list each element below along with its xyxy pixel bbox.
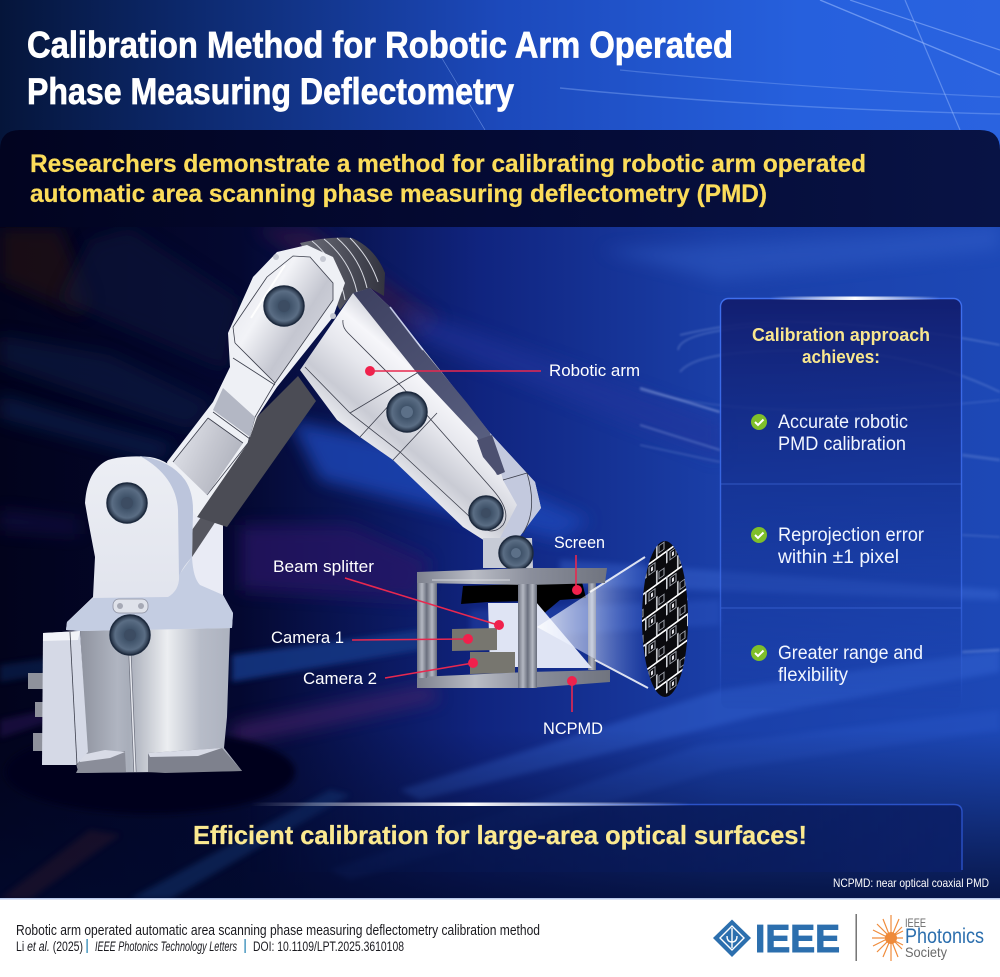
module: frame plates <box>417 568 610 688</box>
arm: wrist neck <box>483 538 533 568</box>
main background with light streaks <box>0 225 1000 899</box>
label: camera 1 <box>271 628 473 647</box>
arm: upper arm dark side <box>197 376 316 527</box>
panel heading: achieves: <box>802 346 880 367</box>
logo: IEEE Photonics Society: Society <box>905 944 947 960</box>
module: beam splitter <box>488 602 592 668</box>
subtitle text <box>30 150 866 208</box>
label: screen: Screen <box>554 533 605 552</box>
arm: elbow ribs <box>300 238 385 310</box>
label: camera 2 <box>303 658 478 688</box>
item: accurate calibration: Accurate robotic <box>778 412 908 433</box>
logo: IEEE <box>713 918 840 961</box>
arm: shoulder casing <box>66 456 233 631</box>
label: beam splitter: Beam splitter <box>273 557 374 576</box>
title <box>27 24 733 112</box>
header background <box>0 0 1000 150</box>
citation: Li et al. (2025) <box>16 939 83 954</box>
label: NCPMD <box>543 676 603 738</box>
subtitle text: Researchers demonstrate a method for calibrating robotic arm operated <box>30 150 866 178</box>
module: projected light beam <box>537 557 648 688</box>
item: greater range: flexibility <box>778 665 848 686</box>
module: target mirror surface <box>642 541 688 697</box>
title: Calibration Method for Robotic Arm Operated <box>27 24 733 66</box>
label: camera 1: Camera 1 <box>271 628 344 647</box>
subtitle band <box>0 130 1000 227</box>
illustration: NCPMD module <box>417 541 688 697</box>
subtitle text: automatic area scanning phase measuring deflectometry (PMD) <box>30 180 767 208</box>
title: Phase Measuring Deflectometry <box>27 71 514 112</box>
label: robotic arm <box>365 361 640 380</box>
panel heading: Calibration approach <box>752 324 930 345</box>
label: NCPMD: NCPMD <box>543 719 603 738</box>
panel: calibration approach achieves <box>720 296 962 708</box>
item: accurate calibration: PMD calibration <box>778 434 906 455</box>
item: reprojection error: Reprojection error <box>778 525 925 546</box>
label: camera 2: Camera 2 <box>303 669 377 688</box>
logo: IEEE Photonics Society: Photonics <box>905 925 984 948</box>
arm: joints <box>107 286 533 655</box>
arm: lower barrel and feet <box>76 626 242 773</box>
item: accurate calibration <box>751 412 908 455</box>
module: cameras <box>452 628 515 674</box>
label: screen <box>554 533 605 595</box>
item: greater range: Greater range and <box>778 643 923 664</box>
arm: connector box <box>28 631 88 765</box>
item: reprojection error <box>751 525 925 568</box>
logo: IEEE Photonics Society: IEEE <box>905 916 926 930</box>
citation: Robotic arm operated automatic area scanning phase measuring deflectometry calibration method <box>16 923 540 939</box>
item: reprojection error: within ±1 pixel <box>777 547 899 568</box>
label: robotic arm: Robotic arm <box>549 361 640 380</box>
citation: DOI: 10.1109/LPT.2025.3610108 <box>253 939 404 954</box>
module: screen <box>461 582 586 620</box>
footer <box>0 898 1000 977</box>
logo: IEEE: IEEE <box>755 918 840 961</box>
callout: conclusion banner <box>193 802 962 872</box>
citation: IEEE Photonics Technology Letters <box>95 939 237 954</box>
item: greater range <box>751 643 923 686</box>
arm: rear base column <box>190 490 230 598</box>
label: beam splitter <box>273 557 504 630</box>
callout: conclusion banner: Efficient calibration for large-area optical surfaces! <box>193 820 807 850</box>
logo: IEEE Photonics Society <box>872 915 984 961</box>
panel heading <box>752 324 930 367</box>
arm: forearm link <box>300 288 541 541</box>
citation <box>16 923 540 954</box>
arm: upper arm link <box>167 245 345 517</box>
illustration: robotic arm <box>28 238 541 773</box>
module: rear posts <box>427 580 596 678</box>
